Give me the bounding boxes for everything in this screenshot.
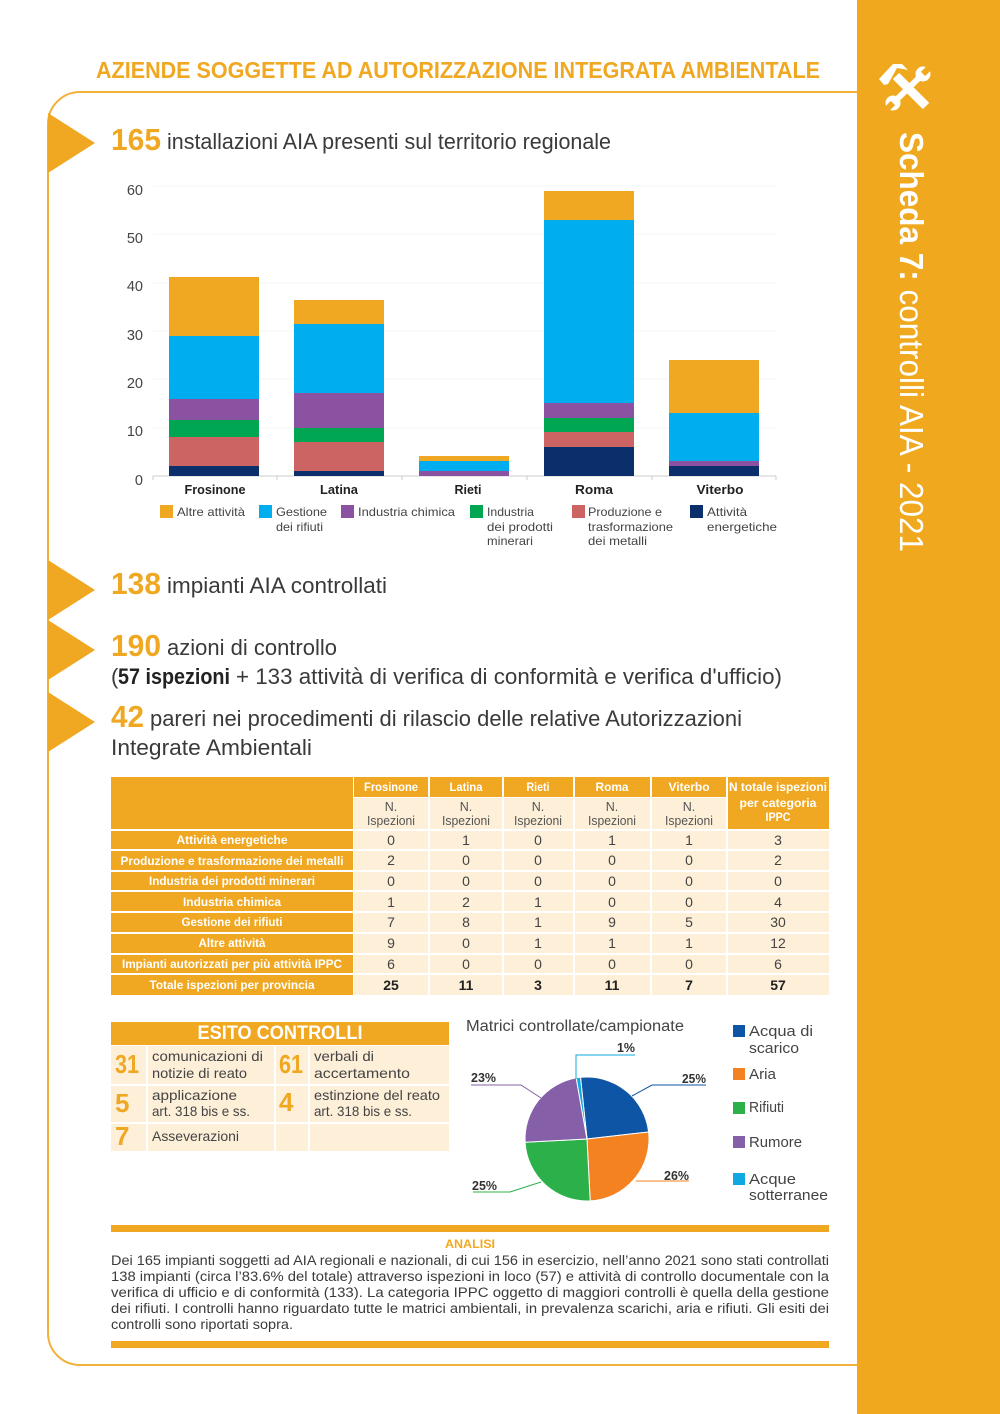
arrow: 138 <box>48 560 95 620</box>
table row: Attività energetiche: 3 <box>774 832 782 848</box>
chart legend: Produzione e <box>588 505 662 519</box>
chart legend: Altre attività <box>177 505 245 519</box>
panel: analisi <box>111 1225 830 1348</box>
table row: Impianti autorizzati per più attività IPPC: Impianti autorizzati per più attività IPPC <box>122 957 342 971</box>
panel: esito controlli: 7 <box>115 1121 129 1151</box>
table row: Attività energetiche: Attività energetiche <box>176 833 288 847</box>
heading: 138 plants: impianti AIA controllati <box>167 573 387 598</box>
panel: esito controlli: ESITO CONTROLLI <box>198 1023 362 1044</box>
chart legend: dei rifiuti <box>276 520 323 534</box>
table row: Gestione dei rifiuti: 1 <box>534 914 542 930</box>
table header: N. <box>683 800 695 814</box>
table row: Produzione e trasformazione dei metalli: 2 <box>387 852 395 868</box>
pie chart: matrici controllate: Matrici controllate/campionate <box>466 1018 684 1035</box>
table row: Gestione dei rifiuti: 30 <box>770 914 786 930</box>
table row: Attività energetiche: 1 <box>462 832 470 848</box>
chart legend: Industria <box>487 505 534 519</box>
table row: Altre attività: Altre attività <box>198 936 266 950</box>
table row: Attività energetiche: 0 <box>534 832 542 848</box>
table row: Industria dei prodotti minerari <box>111 872 829 890</box>
table row: Attività energetiche: 1 <box>608 832 616 848</box>
category labels: Rieti <box>454 482 482 497</box>
y axis labels: 60 <box>127 183 143 199</box>
panel: esito controlli: 5 <box>115 1088 129 1118</box>
icon: hammer and wrench <box>879 64 933 113</box>
heading: 190 control actions: ( <box>111 664 119 689</box>
table header: Rieti <box>526 780 550 794</box>
table row: Totale ispezioni per provincia: 3 <box>534 977 542 993</box>
table row: Impianti autorizzati per più attività IPPC: 0 <box>608 956 616 972</box>
table row: Altre attività: 9 <box>387 935 395 951</box>
panel: analisi: verifica di ufficio e di conformità (133). La categoria IPPC oggetto di maggiori controlli è quella della gestione <box>111 1285 829 1300</box>
heading: 138 plants <box>111 566 387 601</box>
table row: Impianti autorizzati per più attività IPPC: 0 <box>534 956 542 972</box>
table row: Totale ispezioni per provincia: 7 <box>685 977 693 993</box>
bar: Frosinone <box>169 277 259 476</box>
table header: per categoria <box>740 796 817 810</box>
y axis labels: 10 <box>127 424 143 440</box>
chart legend: Gestione <box>276 505 327 519</box>
pie chart: matrici controllate <box>466 1018 828 1204</box>
table row: Industria chimica: 0 <box>608 894 616 910</box>
table row: Gestione dei rifiuti: 5 <box>685 914 693 930</box>
pie chart: matrici controllate: 26% <box>664 1168 689 1183</box>
table header: Ispezioni <box>367 814 415 828</box>
category labels: Roma <box>575 482 614 497</box>
table row: Produzione e trasformazione dei metalli: 0 <box>608 852 616 868</box>
pie legend: Acqua di <box>749 1023 813 1040</box>
panel: analisi: controlli sono riportati sopra. <box>111 1317 293 1332</box>
chart legend: Attività <box>707 505 747 519</box>
table header: Ispezioni <box>588 814 636 828</box>
bar: Roma <box>544 191 634 476</box>
y axis labels <box>127 183 143 489</box>
pie legend: Aria <box>749 1066 777 1083</box>
y axis labels: 20 <box>127 376 143 392</box>
table row: Totale ispezioni per provincia: 57 <box>770 977 786 993</box>
panel: esito controlli: estinzione del reato <box>314 1087 440 1103</box>
table row: Totale ispezioni per provincia: 11 <box>459 977 474 993</box>
main title: AZIENDE SOGGETTE AD AUTORIZZAZIONE INTEGRATA AMBIENTALE <box>96 57 820 83</box>
table row: Totale ispezioni per provincia: 25 <box>383 977 399 993</box>
table header: N totale ispezioni <box>729 780 827 794</box>
table row: Industria chimica: 4 <box>774 894 782 910</box>
chart legend: minerari <box>487 534 533 548</box>
arrow: 165 <box>48 113 95 173</box>
heading: 42 opinions <box>111 699 742 760</box>
panel: esito controlli: Asseverazioni <box>152 1128 239 1144</box>
table header: Frosinone <box>364 780 418 794</box>
pie chart: matrici controllate: 25% <box>472 1178 497 1193</box>
panel: esito controlli: comunicazioni di <box>152 1048 263 1064</box>
heading: 190 control actions: 190 <box>111 628 161 663</box>
table header: N. <box>606 800 618 814</box>
panel: esito controlli <box>111 1022 449 1151</box>
table row: Industria chimica: 0 <box>685 894 693 910</box>
table row: Industria dei prodotti minerari: 0 <box>608 873 616 889</box>
table header: Viterbo <box>668 780 710 794</box>
table row: Produzione e trasformazione dei metalli: 2 <box>774 852 782 868</box>
heading: 42 opinions: pareri nei procedimenti di rilascio delle relative Autorizzazioni <box>150 706 742 731</box>
table row: Produzione e trasformazione dei metalli: Produzione e trasformazione dei metalli <box>120 854 344 868</box>
table row: Industria dei prodotti minerari: 0 <box>685 873 693 889</box>
table row: Industria chimica <box>111 892 829 911</box>
panel: esito controlli: notizie di reato <box>152 1065 247 1081</box>
heading: 190 control actions: 57 ispezioni <box>118 664 230 689</box>
bar: Rieti <box>419 456 509 476</box>
table row: Totale ispezioni per provincia: 11 <box>605 977 620 993</box>
panel: esito controlli: accertamento <box>314 1065 410 1081</box>
table row: Industria dei prodotti minerari: 0 <box>462 873 470 889</box>
table row: Produzione e trasformazione dei metalli: 0 <box>462 852 470 868</box>
panel: esito controlli: verbali di <box>314 1048 374 1064</box>
table header <box>111 777 829 829</box>
table row: Impianti autorizzati per più attività IPPC: 6 <box>774 956 782 972</box>
table header: Ispezioni <box>665 814 713 828</box>
table row: Altre attività: 1 <box>534 935 542 951</box>
y axis labels: 0 <box>135 473 143 489</box>
category labels <box>184 482 744 497</box>
pie chart: matrici controllate: 25% <box>682 1071 706 1086</box>
table row: Attività energetiche: 0 <box>387 832 395 848</box>
table row: Altre attività: 12 <box>770 935 786 951</box>
pie legend: scarico <box>749 1040 799 1057</box>
table row: Altre attività: 0 <box>462 935 470 951</box>
sidebar <box>857 0 1000 1414</box>
pie leader lines and percentages <box>471 1055 706 1192</box>
pie legend: sotterranee <box>749 1187 828 1204</box>
pie legend <box>733 1023 828 1204</box>
chart legend <box>160 505 777 548</box>
panel: analisi: Dei 165 impianti soggetti ad AIA regionali e nazionali, di cui 156 in esercizio, nell’anno 2021 sono stati controllati <box>111 1253 829 1268</box>
panel: esito controlli: 61 <box>279 1049 303 1079</box>
panel: esito controlli: applicazione <box>152 1087 237 1103</box>
inspections table <box>111 777 829 995</box>
heading: 190 control actions: azioni di controllo <box>167 635 337 660</box>
page frame <box>48 92 857 1365</box>
table row: Industria dei prodotti minerari: 0 <box>534 873 542 889</box>
table row: Gestione dei rifiuti: 9 <box>608 914 616 930</box>
panel: analisi: dei rifiuti. I controlli hanno riguardato tutte le matrici ambientali, in prevalenza scarichi, aria e rifiuti. Gli esiti dei <box>111 1301 829 1316</box>
arrow: 42 <box>48 692 95 752</box>
table header: Roma <box>596 780 629 794</box>
sidebar title: Scheda 7: controlli AIA - 2021 <box>893 132 930 552</box>
table row: Industria chimica: 1 <box>387 894 395 910</box>
table row: Impianti autorizzati per più attività IPPC: 0 <box>685 956 693 972</box>
table header: N. <box>532 800 544 814</box>
table row: Industria chimica: 2 <box>462 894 470 910</box>
chart legend: trasformazione <box>588 520 673 534</box>
panel: esito controlli: 4 <box>279 1087 294 1117</box>
chart legend: energetiche <box>707 520 777 534</box>
table row: Altre attività: 1 <box>608 935 616 951</box>
heading: 190 control actions <box>111 628 782 689</box>
table header: N. <box>385 800 397 814</box>
table header: IPPC <box>766 810 791 824</box>
table row: Produzione e trasformazione dei metalli: 0 <box>685 852 693 868</box>
bar: Viterbo <box>669 360 759 476</box>
table row: Industria chimica: Industria chimica <box>183 895 281 909</box>
chart legend: dei prodotti <box>487 520 553 534</box>
category labels: Latina <box>320 482 359 497</box>
table row: Industria dei prodotti minerari: 0 <box>774 873 782 889</box>
pie chart: matrici controllate: 23% <box>471 1070 496 1085</box>
panel: analisi: 138 impianti (circa l’83.6% del totale) attraverso ispezioni in loco (57) e attività di controllo documentale con la <box>111 1269 830 1284</box>
chart legend: dei metalli <box>588 534 647 548</box>
panel: esito controlli: 31 <box>115 1049 139 1079</box>
category labels: Viterbo <box>696 482 744 497</box>
heading: 42 opinions: Integrate Ambientali <box>111 735 312 760</box>
stacked bar chart <box>127 183 777 548</box>
table row: Industria dei prodotti minerari: 0 <box>387 873 395 889</box>
table row: Gestione dei rifiuti: Gestione dei rifiuti <box>182 915 282 929</box>
table row: Attività energetiche: 1 <box>685 832 693 848</box>
table header: Latina <box>450 780 483 794</box>
table row: Attività energetiche <box>111 831 829 849</box>
table row: Impianti autorizzati per più attività IPPC: 0 <box>462 956 470 972</box>
table row: Totale ispezioni per provincia: Totale ispezioni per provincia <box>150 978 315 992</box>
table header: N. <box>460 800 472 814</box>
pie chart: matrici controllate: 1% <box>617 1040 635 1055</box>
chart legend: Industria chimica <box>358 505 455 519</box>
table row: Altre attività <box>111 934 829 953</box>
y axis labels: 50 <box>127 231 143 247</box>
table header: Ispezioni <box>442 814 490 828</box>
bar: Latina <box>294 300 384 476</box>
table row: Gestione dei rifiuti <box>111 913 829 932</box>
pie legend: Rifiuti <box>749 1099 784 1116</box>
panel: esito controlli: art. 318 bis e ss. <box>152 1103 250 1119</box>
table row: Impianti autorizzati per più attività IPPC <box>111 955 829 973</box>
table row: Impianti autorizzati per più attività IPPC: 6 <box>387 956 395 972</box>
heading: 190 control actions: + 133 attività di verifica di conformità e verifica d'ufficio) <box>236 664 782 689</box>
panel: esito controlli: art. 318 bis e ss. <box>314 1103 412 1119</box>
table row: Produzione e trasformazione dei metalli <box>111 851 829 870</box>
table row: Industria dei prodotti minerari: Industria dei prodotti minerari <box>149 874 315 888</box>
panel: analisi: ANALISI <box>445 1237 495 1251</box>
heading: 165 installations: 165 <box>111 122 161 157</box>
table row: Gestione dei rifiuti: 7 <box>387 914 395 930</box>
arrow: 190 <box>48 620 95 680</box>
category labels: Frosinone <box>184 482 246 497</box>
table row: Gestione dei rifiuti: 8 <box>462 914 470 930</box>
table row: Industria chimica: 1 <box>534 894 542 910</box>
heading: 165 installations <box>111 122 611 157</box>
heading: 42 opinions: 42 <box>111 699 144 734</box>
heading: 165 installations: installazioni AIA presenti sul territorio regionale <box>167 129 611 154</box>
y axis labels: 40 <box>127 279 143 295</box>
table header: Ispezioni <box>514 814 562 828</box>
table row: Produzione e trasformazione dei metalli: 0 <box>534 852 542 868</box>
table row: Totale ispezioni per provincia <box>111 975 829 995</box>
table row: Altre attività: 1 <box>685 935 693 951</box>
pie legend: Acque <box>749 1171 796 1188</box>
heading: 138 plants: 138 <box>111 566 161 601</box>
y axis labels: 30 <box>127 328 143 344</box>
pie legend: Rumore <box>749 1134 802 1151</box>
